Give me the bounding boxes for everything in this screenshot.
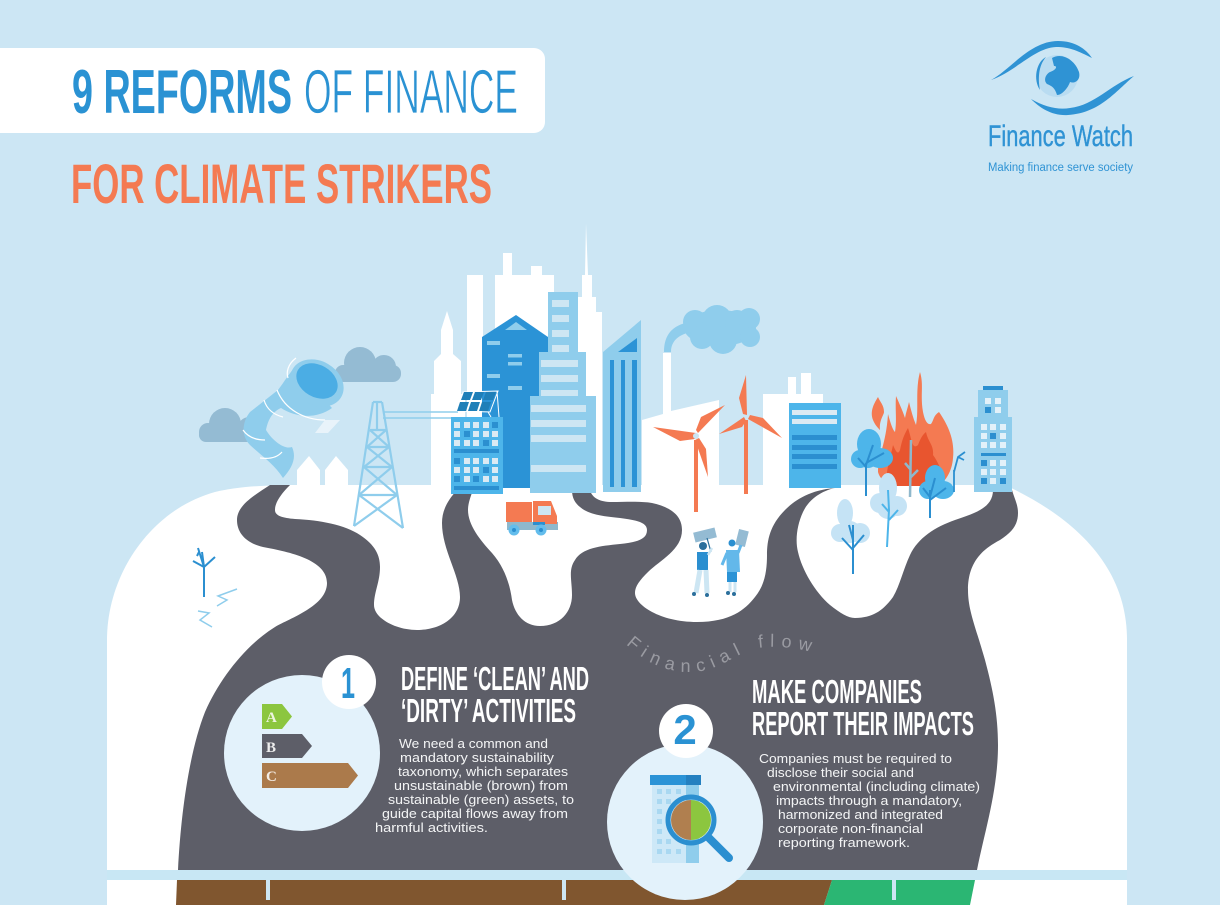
text: reform 1 description: unsustainable (brown) from (394, 778, 568, 793)
building: right tower (974, 386, 1012, 492)
pale trees on land (831, 473, 907, 574)
icon: energy rating labels: B (266, 740, 276, 756)
icon: energy rating labels: C (266, 769, 277, 785)
icon: tornado (243, 350, 352, 478)
icon: wildfire (872, 372, 953, 486)
storm clouds (199, 347, 401, 442)
panel: reform 1 (224, 655, 589, 835)
text: reform 1 description: harmful activities. (375, 820, 488, 835)
text: reform 2 description: impacts through a mandatory, (776, 793, 962, 808)
text: reform 2 description: reporting framework. (778, 835, 910, 850)
text: reform 2 description: harmonized and integrated (778, 807, 943, 822)
icon: smoke cloud (664, 305, 760, 354)
heading: reform 2: REPORT THEIR IMPACTS (752, 705, 974, 742)
trees near fire (851, 429, 965, 518)
icon: building under magnifier (607, 744, 763, 900)
subtitle: FOR CLIMATE STRIKERS (71, 152, 492, 215)
white land (107, 485, 1127, 905)
bare tree and lightning (193, 548, 237, 627)
heading: reform 1 (401, 660, 589, 729)
text: reform 1 description: taxonomy, which separates (398, 764, 569, 779)
heading: reform 1: ‘DIRTY’ ACTIVITIES (401, 692, 576, 729)
text: reform 2 description: disclose their social and (767, 765, 914, 780)
panel: reform 2 (607, 673, 980, 900)
protester two (722, 529, 749, 596)
text: reform 1 description: We need a common and (399, 736, 548, 751)
brown and green ground strip (176, 880, 975, 905)
title banner (0, 48, 545, 133)
dark financial flow river (178, 485, 1018, 870)
text: reform 2 description: environmental (including climate) (773, 779, 980, 794)
text: reform 1 description (375, 736, 574, 835)
number badge 1: 1 (341, 659, 355, 708)
number badge 1 (322, 655, 376, 709)
number badge 2 (659, 704, 713, 758)
heading: reform 2 (752, 673, 974, 742)
curved label: financial flow: Financial flow (627, 634, 812, 672)
icon: houses (297, 456, 348, 486)
horizontal divider bar (107, 870, 1127, 880)
building: dark blue house-top tower (482, 315, 548, 488)
text: reform 2 description: Companies must be required to (759, 751, 952, 766)
text: reform 1 description: mandatory sustainability (400, 750, 555, 765)
number badge 2: 2 (673, 706, 697, 753)
logo: Finance Watch: Making finance serve society (988, 162, 1133, 174)
icon: energy rating labels (224, 675, 380, 831)
building: blue striped block (789, 403, 841, 488)
title banner: 9 REFORMS (72, 58, 292, 127)
logo: Finance Watch (988, 41, 1134, 174)
icon: electricity pylon (354, 402, 458, 528)
protester one (692, 527, 717, 597)
building: slanted striped tower (603, 320, 641, 492)
icon: wind turbines (653, 375, 782, 512)
title banner: OF FINANCE (304, 58, 518, 127)
building: solar panel block (451, 391, 503, 494)
logo: Finance Watch: Finance Watch (988, 120, 1133, 153)
heading: reform 1: DEFINE ‘CLEAN’ AND (401, 660, 589, 697)
building: light stepped tower (530, 292, 596, 493)
white skyline backdrop (431, 223, 823, 486)
heading: reform 2: MAKE COMPANIES (752, 673, 922, 710)
text: reform 2 description (759, 751, 980, 850)
icon: truck (506, 501, 558, 536)
text: reform 1 description: guide capital flows away from (382, 806, 568, 821)
icon: energy rating labels: A (266, 710, 277, 726)
text: reform 1 description: sustainable (green) assets, to (388, 792, 574, 807)
text: reform 2 description: corporate non-financial (778, 821, 923, 836)
